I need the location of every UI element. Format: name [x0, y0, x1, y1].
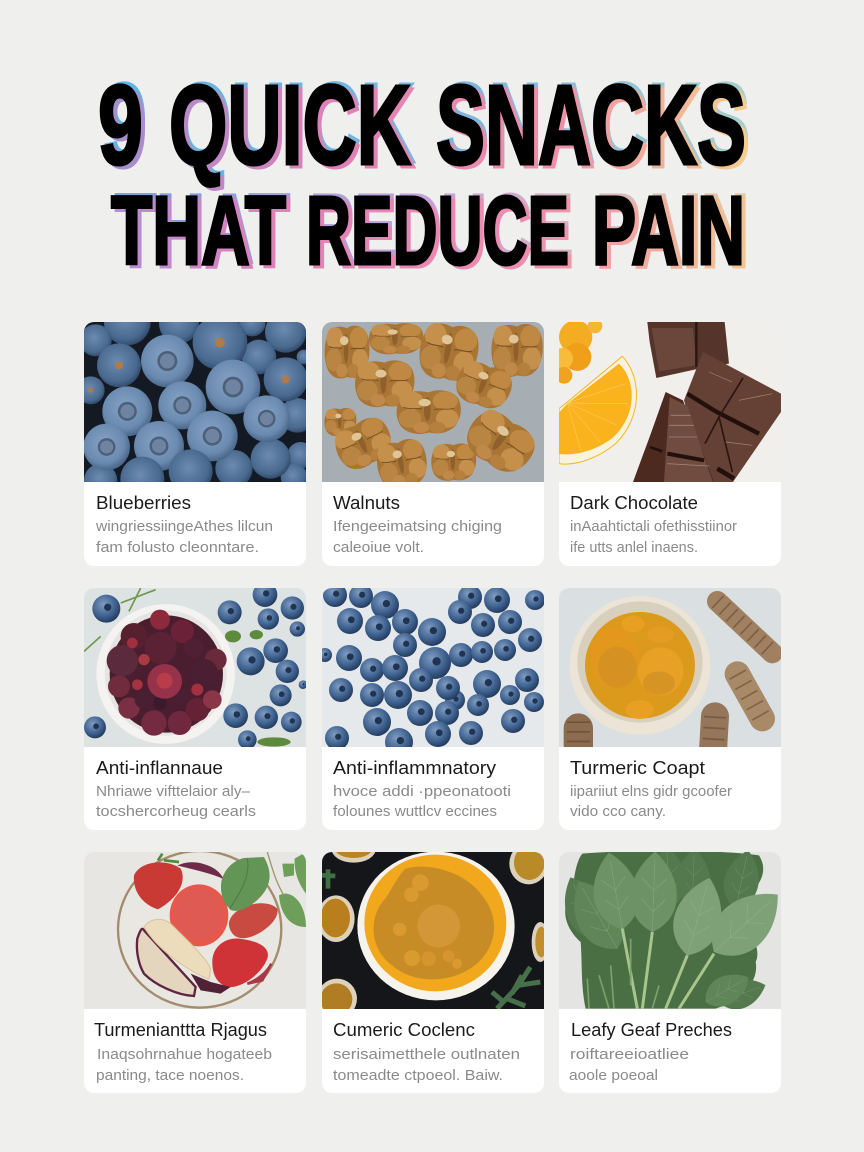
description: Dark Chocolate: ife utts anlel inaens.	[570, 539, 698, 556]
description: Anti-inflannaue	[96, 783, 256, 820]
label: Turmeric Coapt: Turmeric Coapt	[570, 758, 705, 778]
description: Turmeric Coapt: vido cco cany.	[570, 803, 666, 820]
title: REDUCE	[306, 176, 569, 285]
panel: anti-inflammatory berries card	[84, 582, 307, 830]
image: turmeric soup bowl	[322, 852, 544, 1009]
description: Cumeric Coclenc: tomeadte ctpoeol. Baiw.	[333, 1067, 503, 1084]
title: REDUCE	[310, 179, 573, 288]
panel: turmeric card	[559, 588, 781, 830]
description: Dark Chocolate: inAaahtictali ofethisstiinor	[570, 518, 737, 535]
title: THAT	[111, 176, 286, 285]
description: Anti-inflammnatory: hvoce addi ·ppeonatooti	[333, 783, 511, 800]
description: Walnuts: Ifengeeimatsing chiging	[333, 518, 502, 535]
image: walnuts	[322, 320, 544, 491]
description: Walnuts: caleoiue volt.	[333, 539, 424, 556]
panel: cumeric card	[322, 852, 544, 1093]
description: Turmenianttta Rjagus: Inaqsohrnahue hogateeb	[97, 1046, 272, 1063]
description: Anti-inflammnatory	[333, 783, 511, 820]
description: Leafy Geaf Preches: roiftareeioatliee	[570, 1046, 689, 1063]
title: THAT	[115, 179, 290, 288]
description: Dark Chocolate	[570, 518, 737, 556]
image: turmeric bowl and roots	[559, 588, 781, 751]
panel: dark chocolate card	[552, 319, 781, 566]
label: Blueberries: Blueberries	[96, 493, 191, 513]
title: 9	[102, 65, 147, 191]
image: blueberries	[84, 322, 306, 482]
title	[98, 60, 750, 288]
description: Anti-inflannaue: tocshercorheug cearls	[96, 803, 256, 820]
description: Walnuts	[333, 518, 502, 556]
title: PAIN	[596, 174, 749, 283]
description: Anti-inflannaue: Nhriawe vifttelaior aly–	[96, 783, 251, 800]
title: REDUCE	[310, 174, 573, 283]
title: 9	[102, 60, 147, 186]
panel: leafy greens card	[559, 852, 781, 1093]
panel: anti-inflammatory blueberries card	[318, 583, 545, 830]
description: Leafy Geaf Preches	[569, 1046, 689, 1084]
title: PAIN	[596, 179, 749, 288]
image: spinach leaves	[559, 852, 781, 1009]
description: Anti-inflammnatory: folounes wuttlcv eccines	[333, 803, 497, 820]
title: QUICK	[173, 60, 415, 186]
title: THAT	[115, 174, 290, 283]
label: Anti-inflammnatory: Anti-inflammnatory	[333, 758, 496, 778]
title: 9	[98, 62, 143, 188]
label: Walnuts: Walnuts	[333, 493, 400, 513]
label: Anti-inflannaue: Anti-inflannaue	[96, 758, 223, 778]
description: Blueberries	[95, 518, 273, 556]
description: Leafy Geaf Preches: aoole poeoal	[569, 1067, 658, 1084]
panel: blueberries card	[84, 322, 306, 566]
panel: walnuts card	[322, 320, 544, 566]
description: Turmenianttta Rjagus: panting, tace noenos.	[96, 1067, 244, 1084]
title: QUICK	[169, 62, 411, 188]
image: dark chocolate and orange	[552, 319, 781, 482]
label: Turmenianttta Rjagus: Turmenianttta Rjagus	[94, 1020, 267, 1040]
image: scattered blueberries	[322, 588, 544, 747]
title: PAIN	[592, 176, 745, 285]
image: bowl of berries	[84, 582, 307, 749]
label: Leafy Geaf Preches: Leafy Geaf Preches	[571, 1020, 732, 1040]
description: Blueberries: fam folusto cleonntare.	[96, 539, 259, 556]
panel: fruit plate card	[84, 851, 306, 1093]
title: QUICK	[173, 65, 415, 191]
description: Blueberries: wingriessiingeAthes lilcun	[95, 518, 273, 535]
description: Turmenianttta Rjagus	[96, 1046, 272, 1084]
label: Dark Chocolate: Dark Chocolate	[570, 493, 698, 513]
description: Cumeric Coclenc: serisaimetthele outlnaten	[333, 1046, 520, 1063]
image: strawberries and fruit plate	[84, 851, 306, 1009]
description: Turmeric Coapt: iipariiut elns gidr gcoofer	[570, 783, 732, 800]
description: Cumeric Coclenc	[333, 1046, 520, 1084]
description: Turmeric Coapt	[570, 783, 732, 820]
label: Cumeric Coclenc: Cumeric Coclenc	[333, 1020, 475, 1040]
